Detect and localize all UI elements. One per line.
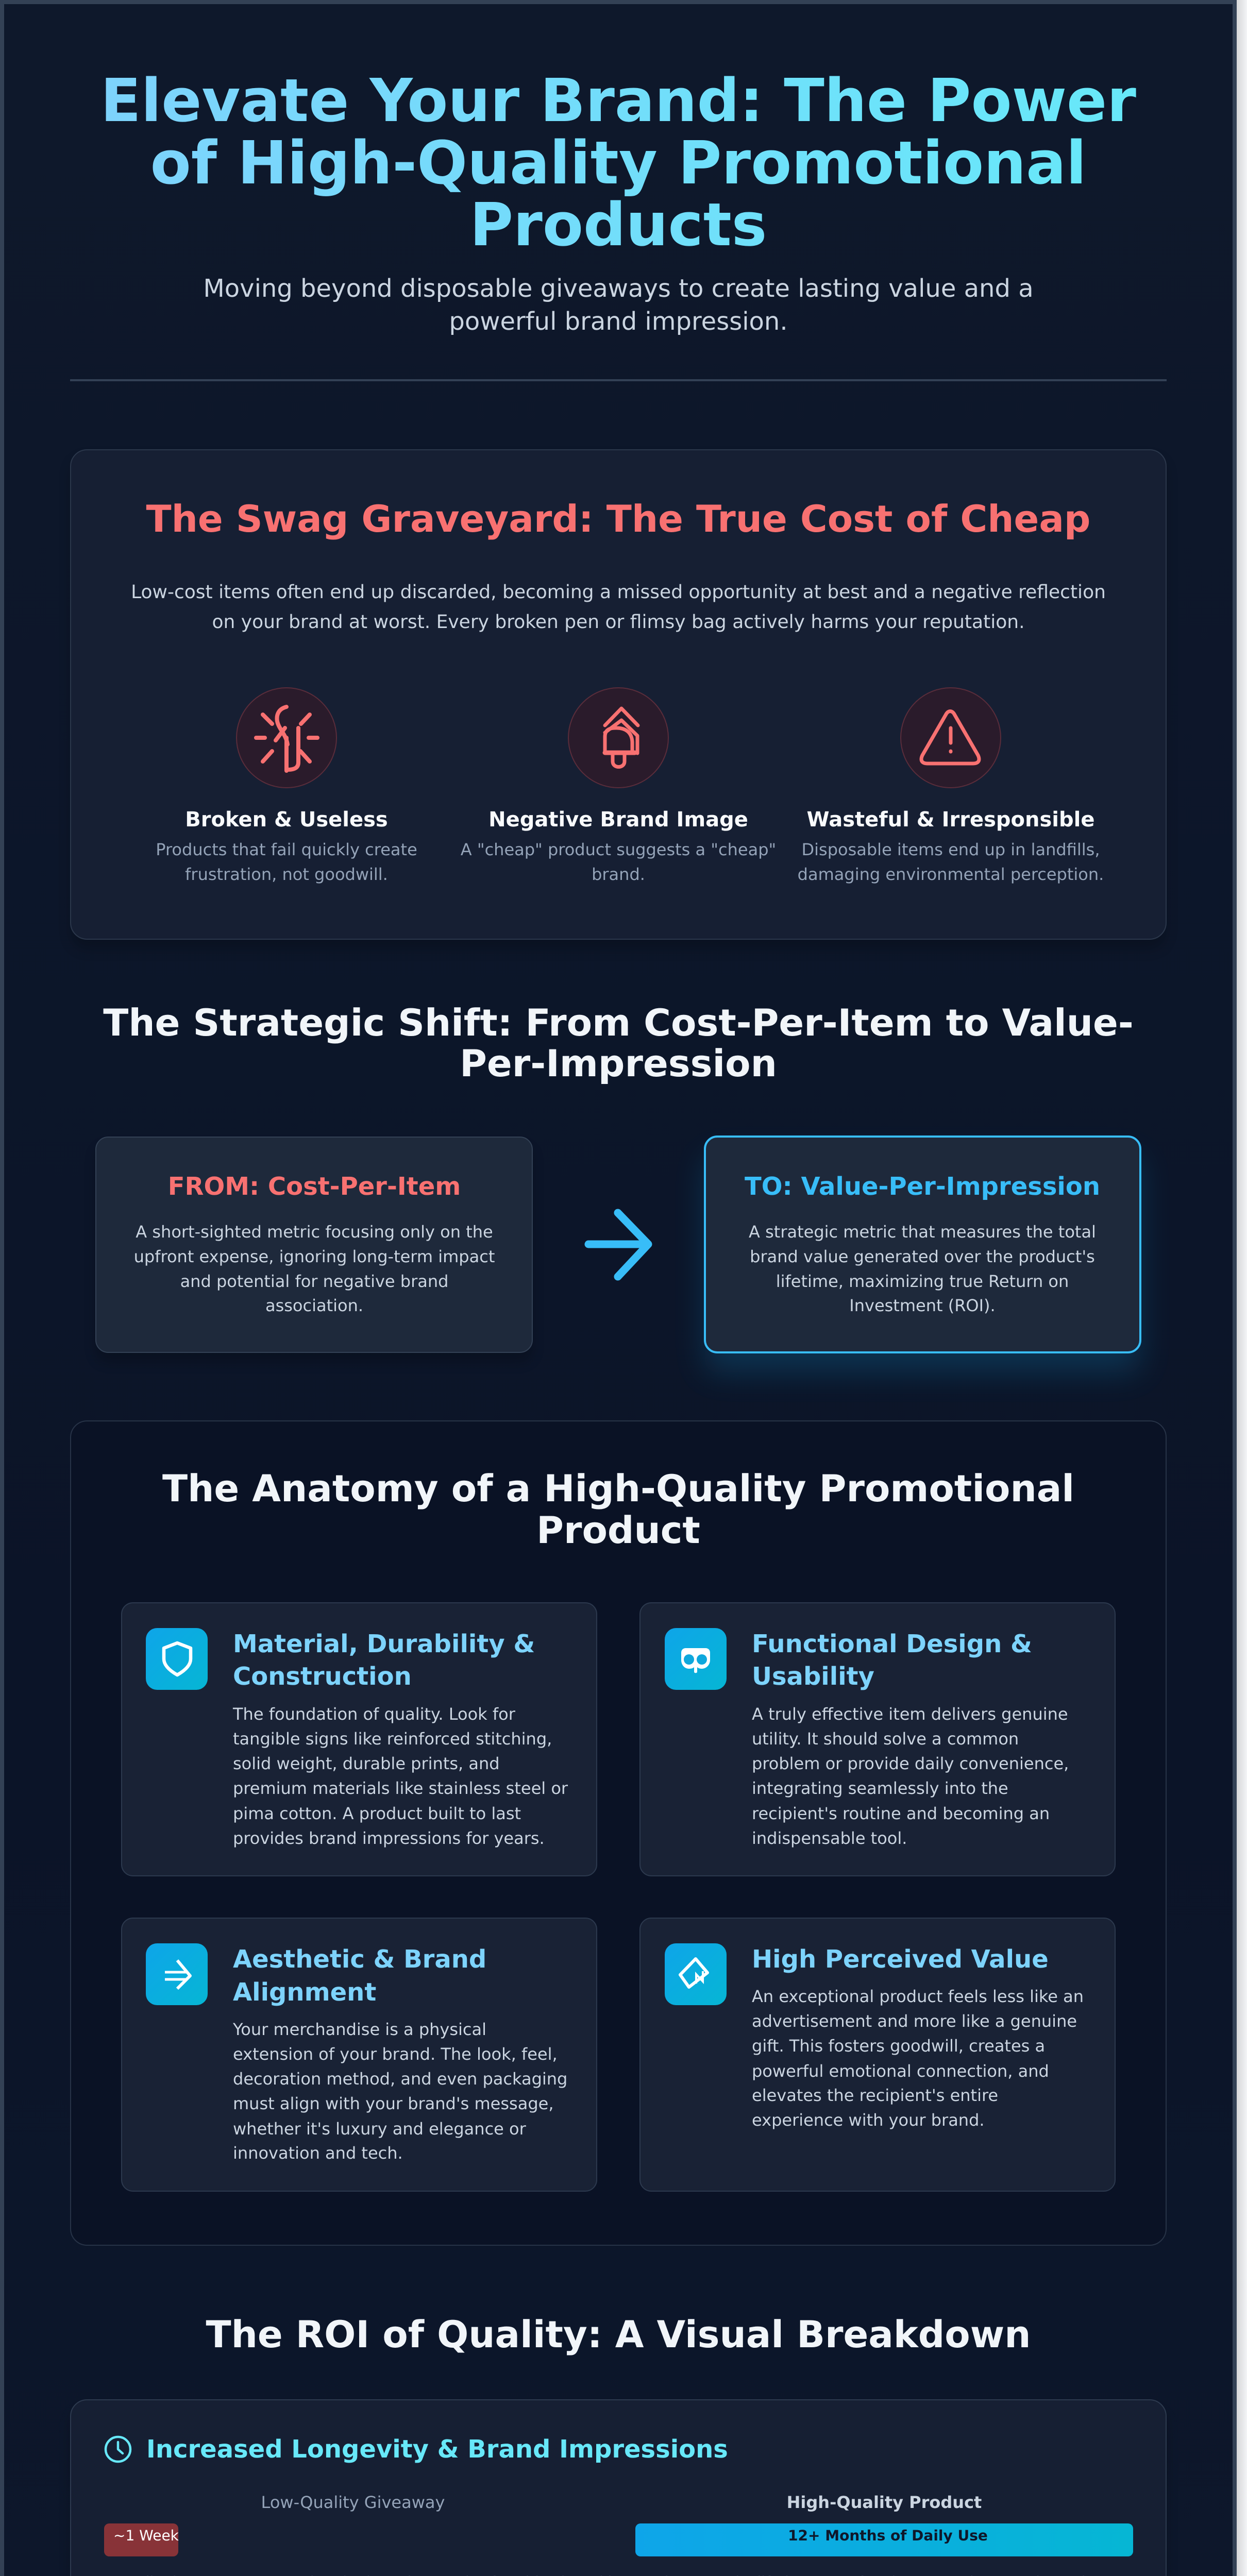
item heading: Wasteful & Irresponsible [807, 808, 1094, 832]
card heading: TO: Value-Per-Impression [745, 1172, 1100, 1201]
card: aesthetic [122, 1918, 597, 2191]
panel heading: Increased Longevity & Brand Impressions [146, 2435, 728, 2464]
card heading: High Perceived Value [752, 1945, 1049, 1974]
item heading: Negative Brand Image [488, 808, 748, 832]
header [100, 66, 1136, 336]
panel: anatomy of a high-quality product [71, 1421, 1166, 2245]
card heading: Functional Design & [752, 1630, 1032, 1658]
item: wasteful and irresponsible [798, 688, 1104, 884]
card text: powerful emotional connection, and [752, 2061, 1049, 2081]
card text: A short-sighted metric focusing only on the [136, 1222, 493, 1242]
card text: utility. It should solve a common [752, 1729, 1019, 1749]
icon: warning triangle [901, 688, 1001, 788]
title: Products [470, 191, 767, 260]
card: from cost-per-item [96, 1137, 532, 1362]
icon: tool [665, 1628, 727, 1690]
section heading: strategic shift: The Strategic Shift: From Cost-Per-Item to Value- [103, 1001, 1134, 1044]
card: material [122, 1603, 597, 1876]
card text: tangible signs like reinforced stitching, [233, 1729, 552, 1749]
icon: broken link [237, 688, 336, 788]
card text: A strategic metric that measures the total [749, 1222, 1096, 1242]
card text: pima cotton. A product built to last [233, 1804, 521, 1823]
card: to value-per-impression [705, 1137, 1140, 1372]
panel: longevity [71, 2400, 1166, 2576]
arrow [588, 1213, 648, 1277]
card text: elevates the recipient's entire [752, 2086, 998, 2105]
card text: Your merchandise is a physical [232, 2020, 486, 2039]
label: high quality: High-Quality Product [787, 2493, 982, 2512]
subtitle: powerful brand impression. [449, 307, 788, 336]
card text: solid weight, durable prints, and [233, 1754, 500, 1773]
card text: integrating seamlessly into the [752, 1778, 1008, 1798]
panel: swag graveyard [71, 450, 1166, 950]
card text: innovation and tech. [233, 2143, 403, 2163]
item text: damaging environmental perception. [798, 865, 1104, 884]
card text: A truly effective item delivers genuine [752, 1704, 1068, 1724]
icon: clock [106, 2437, 130, 2462]
intro text: Low-cost items often end up discarded, becoming a missed opportunity at best and a negative reflection [131, 582, 1106, 603]
icon: shield [146, 1628, 208, 1690]
item text: A "cheap" product suggests a "cheap" [461, 840, 776, 859]
card text: advertisement and more like a genuine [752, 2011, 1077, 2031]
bar: twelve months [635, 2523, 1133, 2556]
icon: diamond [665, 1943, 727, 2005]
card heading: Construction [233, 1662, 412, 1691]
item heading: Broken & Useless [185, 808, 388, 832]
bar: one week: ~1 Week [113, 2527, 179, 2544]
icon: arrow [146, 1943, 208, 2005]
title: of High-Quality Promotional [150, 129, 1086, 198]
card text: whether it's luxury and elegance or [233, 2119, 527, 2139]
item text: Disposable items end up in landfills, [801, 840, 1100, 859]
card heading: FROM: Cost-Per-Item [168, 1172, 461, 1201]
card text: experience with your brand. [752, 2110, 985, 2130]
card: functional design [640, 1603, 1115, 1876]
bar: one week [104, 2523, 179, 2556]
panel heading: Product [536, 1509, 700, 1552]
panel heading: The Swag Graveyard: The True Cost of Cheap [146, 497, 1090, 540]
item: broken and useless [156, 688, 417, 884]
card heading: Usability [752, 1662, 874, 1691]
bar: twelve months: 12+ Months of Daily Use [788, 2527, 988, 2544]
panel heading: The Anatomy of a High-Quality Promotional [162, 1467, 1074, 1510]
card text: lifetime, maximizing true Return on [776, 1272, 1069, 1291]
section heading: strategic shift: Per-Impression [460, 1042, 777, 1085]
card text: brand value generated over the product's [750, 1247, 1095, 1266]
label: low quality: Low-Quality Giveaway [261, 2493, 445, 2512]
card heading: Material, Durability & [233, 1630, 535, 1658]
card text: The foundation of quality. Look for [232, 1704, 516, 1724]
card heading: Aesthetic & Brand [233, 1945, 486, 1974]
card text: indispensable tool. [752, 1828, 907, 1848]
item text: brand. [592, 865, 645, 884]
card heading: Alignment [233, 1978, 376, 2007]
item: negative brand image [461, 688, 776, 884]
item text: frustration, not goodwill. [185, 865, 388, 884]
card: perceived value [640, 1918, 1115, 2191]
card text: gift. This fosters goodwill, creates a [752, 2036, 1045, 2056]
item text: Products that fail quickly create [156, 840, 417, 859]
card text: must align with your brand's message, [233, 2094, 553, 2113]
card text: upfront expense, ignoring long-term impact [134, 1247, 495, 1266]
card text: provides brand impressions for years. [233, 1828, 545, 1848]
card text: Investment (ROI). [849, 1296, 996, 1315]
card text: association. [265, 1296, 363, 1315]
card text: premium materials like stainless steel or [233, 1778, 568, 1798]
section heading: ROI of quality: The ROI of Quality: A Visual Breakdown [206, 2313, 1031, 2356]
subtitle: Moving beyond disposable giveaways to create lasting value and a [203, 274, 1034, 303]
card text: problem or provide daily convenience, [752, 1754, 1069, 1773]
card text: extension of your brand. The look, feel, [233, 2044, 558, 2064]
intro text: on your brand at worst. Every broken pen or flimsy bag actively harms your reputation. [212, 612, 1025, 633]
card text: decoration method, and even packaging [233, 2069, 567, 2089]
title: Elevate Your Brand: The Power [100, 66, 1136, 135]
card text: recipient's routine and becoming an [752, 1804, 1050, 1823]
card text: and potential for negative brand [180, 1272, 448, 1291]
icon: bell and house [568, 688, 668, 788]
card text: An exceptional product feels less like an [752, 1987, 1084, 2006]
